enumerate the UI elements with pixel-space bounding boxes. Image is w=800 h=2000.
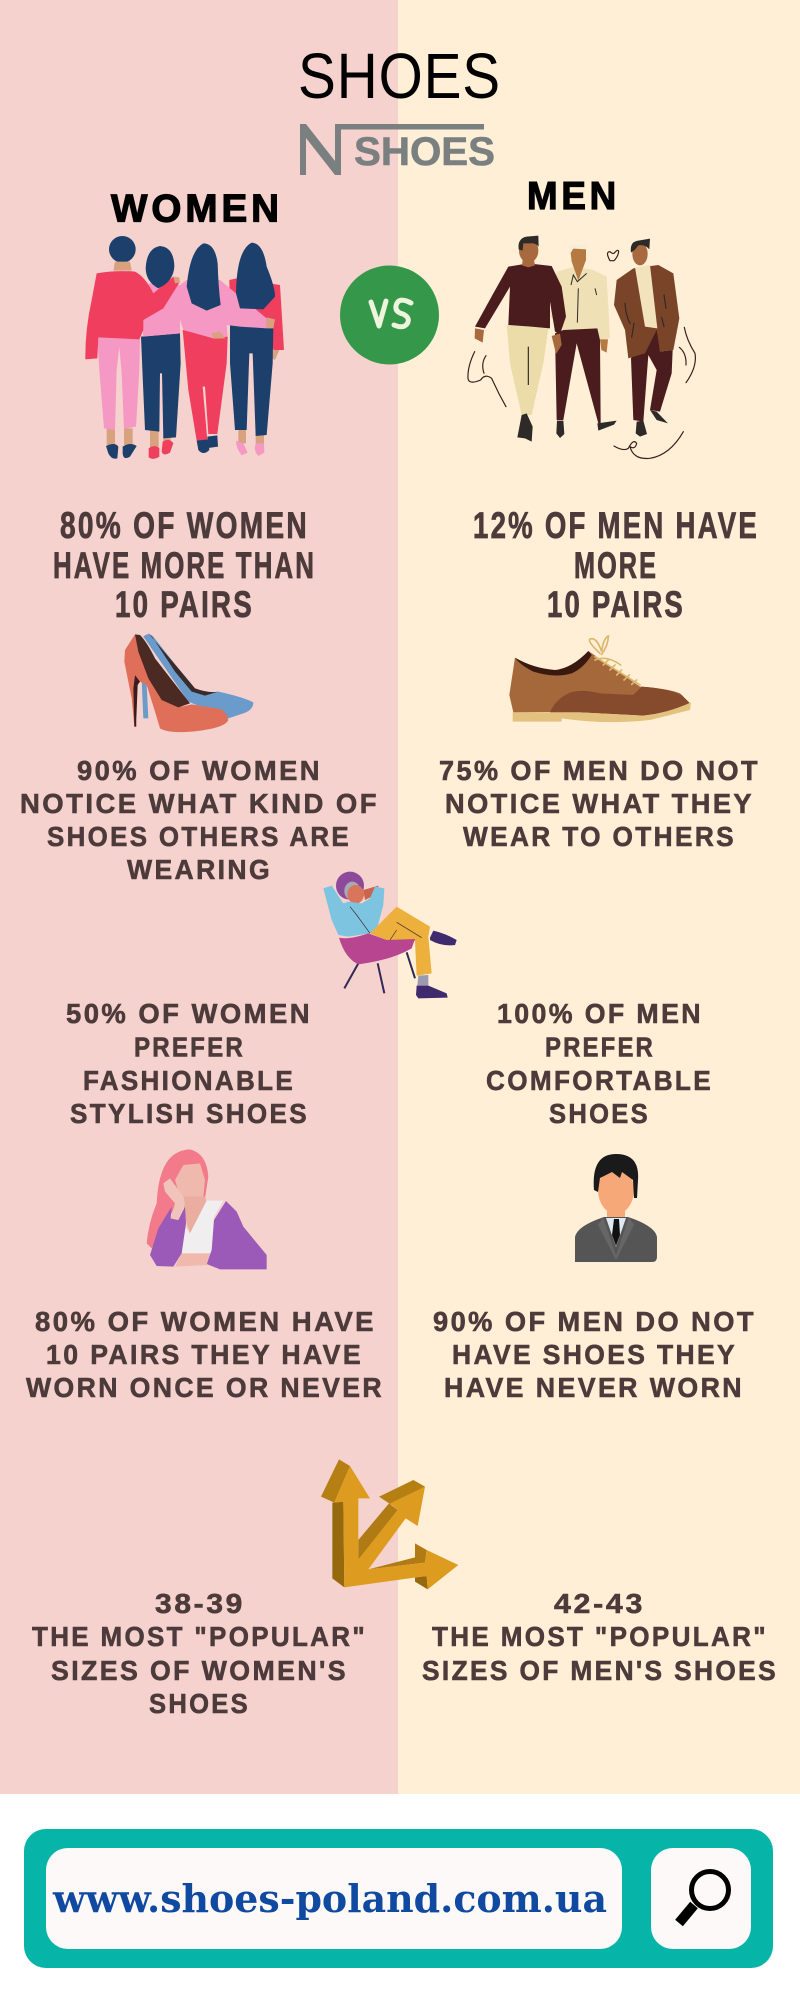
title: SHOES: [298, 40, 501, 112]
url box: www.shoes-poland.com.ua: [52, 1876, 607, 1921]
stat: 80% of women have more than 10 pairs: HAVE MORE THAN: [53, 545, 316, 586]
illustration: person relaxing in chair: [323, 872, 457, 998]
search bar: [24, 1829, 773, 1968]
stat: 80% of women worn once or never: 10 PAIRS THEY HAVE: [46, 1339, 363, 1370]
stat: 100% of men prefer comfortable: PREFER: [545, 1032, 655, 1062]
stat: 90% of men never worn: 90% OF MEN DO NOT: [433, 1306, 756, 1337]
stat: 90% of women notice: [20, 755, 379, 885]
panel: women background: [0, 0, 398, 1794]
stat: women's popular sizes: 38-39: [155, 1588, 245, 1619]
stat: 90% of women notice: 90% OF WOMEN: [77, 755, 322, 786]
illustration: four women from behind: [85, 236, 284, 459]
stat: 80% of women worn once or never: 80% OF WOMEN HAVE: [35, 1306, 376, 1337]
icon: three-way golden arrow: [321, 1459, 458, 1589]
stat: women's popular sizes: [32, 1588, 367, 1719]
stat: 100% of men prefer comfortable: [486, 998, 713, 1129]
logo: N SHOES: SHOES: [354, 130, 495, 174]
stat: 90% of men never worn: HAVE NEVER WORN: [444, 1372, 744, 1403]
stat: 100% of men prefer comfortable: COMFORTABLE: [486, 1065, 713, 1096]
illustration: three men walking: [468, 236, 695, 459]
stat: 90% of men never worn: [433, 1306, 756, 1403]
url box: [46, 1848, 622, 1949]
stat: 50% of women prefer fashionable: [66, 998, 312, 1129]
stat: 75% of men do not notice: 75% OF MEN DO NOT: [439, 755, 760, 786]
stat: 75% of men do not notice: [439, 755, 760, 852]
stat: 90% of men never worn: HAVE SHOES THEY: [452, 1339, 737, 1370]
stat: 75% of men do not notice: WEAR TO OTHERS: [463, 821, 736, 852]
icon: man in grey suit: [575, 1154, 657, 1262]
stat: 50% of women prefer fashionable: PREFER: [134, 1032, 245, 1062]
stat: women's popular sizes: SIZES OF WOMEN'S: [51, 1655, 348, 1686]
stat: 100% of men prefer comfortable: SHOES: [549, 1098, 650, 1129]
stat: 90% of women notice: WEARING: [127, 854, 272, 885]
stat: 12% of men have more 10 pairs: [473, 505, 759, 625]
stat: 80% of women have more than 10 pairs: [53, 505, 316, 625]
vs badge: [340, 266, 439, 364]
stat: 50% of women prefer fashionable: FASHIONABLE: [83, 1065, 295, 1096]
heading: women: WOMEN: [111, 188, 283, 230]
stat: men's popular sizes: SIZES OF MEN'S SHOES: [422, 1655, 778, 1686]
stat: 90% of women notice: NOTICE WHAT KIND OF: [20, 788, 379, 819]
search button with magnifier icon: [651, 1848, 751, 1949]
icon: high heels: [124, 632, 253, 732]
stat: women's popular sizes: THE MOST "POPULAR": [32, 1621, 367, 1652]
stat: 50% of women prefer fashionable: STYLISH SHOES: [70, 1098, 309, 1129]
stat: 80% of women have more than 10 pairs: 80% OF WOMEN: [60, 505, 309, 546]
logo: N SHOES: [300, 124, 495, 175]
stat: men's popular sizes: THE MOST "POPULAR": [432, 1621, 768, 1652]
stat: 80% of women worn once or never: [26, 1306, 384, 1403]
stat: women's popular sizes: SHOES: [149, 1688, 250, 1719]
stat: 90% of women notice: SHOES OTHERS ARE: [47, 821, 351, 852]
stat: 80% of women worn once or never: WORN ONCE OR NEVER: [26, 1372, 384, 1403]
stat: 12% of men have more 10 pairs: 10 PAIRS: [547, 584, 685, 625]
stat: men's popular sizes: 42-43: [554, 1588, 645, 1619]
icon: woman with pink hair: [147, 1149, 267, 1269]
stat: 80% of women have more than 10 pairs: 10 PAIRS: [115, 584, 254, 625]
stat: men's popular sizes: [422, 1588, 778, 1686]
stat: 75% of men do not notice: NOTICE WHAT THEY: [445, 788, 754, 819]
panel: men background: [398, 0, 800, 1794]
stat: 100% of men prefer comfortable: 100% OF MEN: [497, 998, 703, 1029]
stat: 12% of men have more 10 pairs: MORE: [574, 545, 658, 586]
icon: brown men's shoe: [509, 636, 691, 722]
stat: 50% of women prefer fashionable: 50% OF WOMEN: [66, 998, 312, 1029]
heading: men: MEN: [527, 175, 620, 218]
